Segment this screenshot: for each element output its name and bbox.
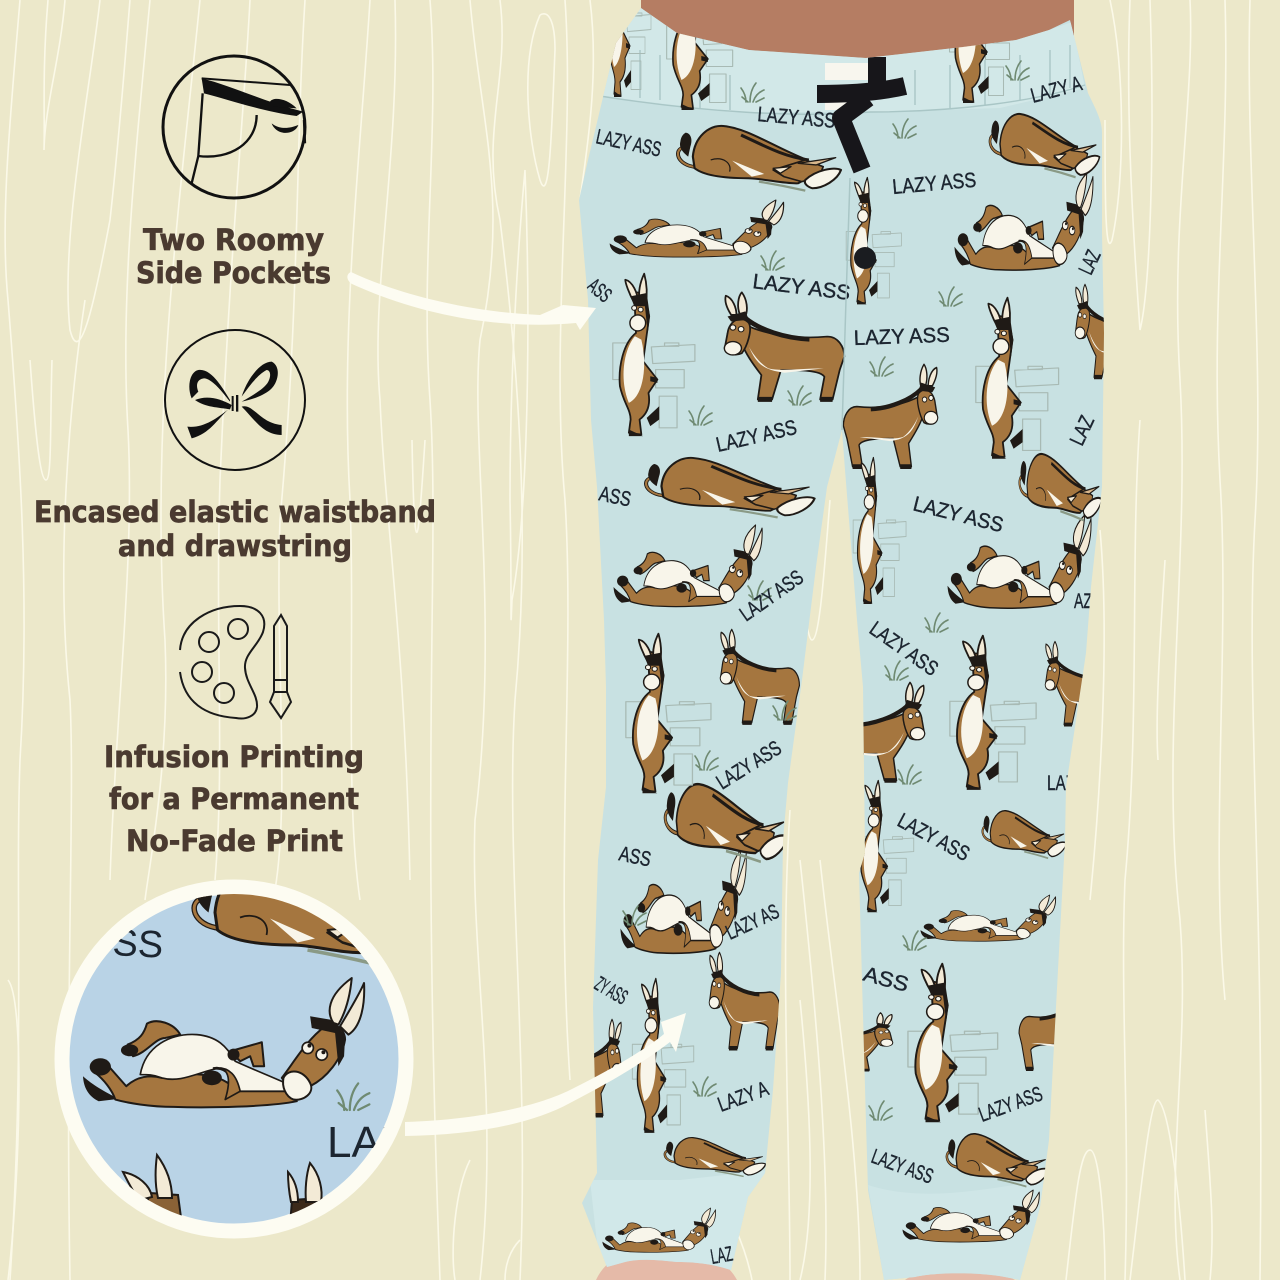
- skin: right ankle: [905, 1266, 1015, 1280]
- print text: LAZY ASS: LAZY ASS: [853, 324, 950, 350]
- grass tufts: [623, 61, 1029, 1120]
- print text: LAZY ASS: ASS: [583, 274, 616, 307]
- print text: LAZY ASS: LAZY ASS: [714, 416, 799, 457]
- pants: pajama trousers with donkey print: [579, 8, 1104, 1280]
- waistband gathers: [600, 45, 1085, 114]
- donkey print: standing: [554, 284, 1143, 1117]
- print text: LAZY ASS: LAZ: [1075, 247, 1106, 278]
- heading: infusion printing: [104, 740, 364, 858]
- print text: LAZY ASS: LAZY ASS: [712, 737, 786, 794]
- donkey print: upright leaning on sign: [605, 0, 1059, 1133]
- close-up text: SS: [112, 922, 164, 967]
- print text: LAZY ASS: [583, 72, 1106, 1269]
- heading: two roomy side pockets: [136, 223, 331, 290]
- print text: LAZY ASS: ZY ASS: [590, 972, 631, 1009]
- print text: LAZY ASS: LAZY ASS: [736, 566, 808, 626]
- arrow: to fabric print: [405, 1013, 686, 1136]
- heading: encased elastic waistband: and drawstring: [118, 529, 352, 563]
- drawstring: [817, 57, 905, 170]
- drawstring label: [825, 63, 868, 110]
- callout: fabric close-up circle: [62, 866, 422, 1231]
- fly seam: [842, 178, 850, 430]
- print text: LAZY ASS: LAZY ASS: [751, 270, 851, 305]
- print text: LAZY ASS: LAZY AS: [722, 900, 783, 945]
- print text: LAZY ASS: LAZY ASS: [894, 809, 973, 866]
- heading: infusion printing: Infusion Printing: [104, 740, 364, 774]
- print text: LAZY ASS: AZ: [1074, 590, 1092, 613]
- close-up donkey lying on back: [83, 978, 364, 1107]
- print text: LAZY ASS: LAZY ASS: [891, 169, 977, 199]
- close-up donkey ears, left: [123, 1155, 182, 1225]
- print text: LAZY ASS: LAZY A: [715, 1077, 772, 1117]
- button: [854, 247, 876, 269]
- print text: LAZY ASS: LAZY ASS: [594, 125, 663, 162]
- close-up donkey sitting: [191, 894, 370, 965]
- close-up donkey ears, right: [287, 1161, 323, 1214]
- heading: two roomy side pockets: Side Pockets: [136, 256, 331, 290]
- skin: torso at waist: [641, 0, 1074, 68]
- arrow: to pocket: [347, 272, 596, 330]
- heading: infusion printing: for a Permanent: [109, 782, 359, 816]
- heading: encased elastic waistband: Encased elastic waistband: [34, 495, 436, 529]
- donkey print: lying on back: [602, 173, 1093, 1252]
- print text: LAZY ASS: LAZY ASS: [757, 103, 836, 133]
- icon: bow: [165, 330, 305, 470]
- print text: LAZY ASS: LAZ: [1066, 412, 1099, 449]
- print text: LAZY ASS: LAZY ASS: [976, 1083, 1046, 1127]
- close-up text: LAZ: LAZ: [327, 1118, 408, 1167]
- skin: left ankle: [596, 1251, 737, 1280]
- print text: LAZY ASS: LAZ: [709, 1242, 735, 1269]
- print text: LAZY ASS: ASS: [617, 842, 653, 872]
- print text: LAZY ASS: ASS: [597, 482, 633, 512]
- print text: LAZY ASS: ASS: [861, 963, 911, 997]
- print text: LAZY ASS: LAZY A: [1028, 72, 1085, 108]
- print text: LAZY ASS: LAZY ASS: [865, 617, 942, 681]
- icon: palette and brush: [180, 606, 291, 719]
- icon: pocket: [163, 56, 305, 198]
- heading: two roomy side pockets: Two Roomy: [143, 223, 324, 257]
- print text: LAZY ASS: LAZY ASS: [911, 493, 1006, 537]
- heading: encased elastic waistband: [34, 495, 436, 563]
- donkey print: sitting asleep: [646, 114, 1102, 1187]
- print text: LAZY ASS: LAZY ASS: [868, 1145, 936, 1189]
- heading: infusion printing: No-Fade Print: [126, 824, 343, 858]
- print text: LAZY ASS: LAZ: [1047, 772, 1075, 795]
- close-up grass: [337, 1083, 369, 1110]
